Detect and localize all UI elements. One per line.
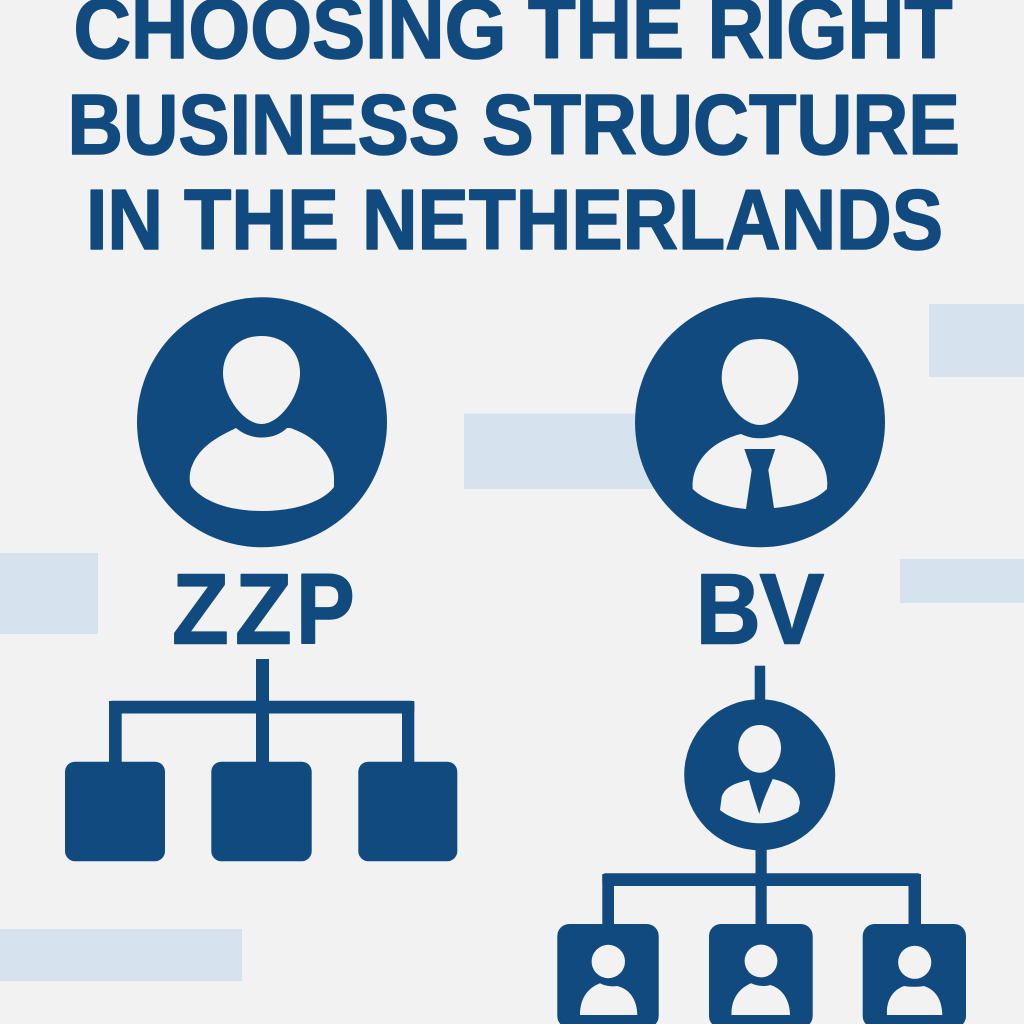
staff card 1 bbox=[557, 924, 659, 1024]
label: BV: V bbox=[760, 553, 824, 665]
label: ZZP bbox=[172, 553, 355, 665]
title: THE bbox=[184, 173, 339, 268]
staff card 2 bbox=[709, 924, 813, 1024]
label: BV: B bbox=[696, 554, 761, 665]
chart: ZZP structure bbox=[65, 659, 457, 861]
chart: BV structure bbox=[557, 666, 966, 1024]
title: BUSINESS bbox=[68, 78, 460, 173]
label: ZZP: P bbox=[296, 553, 355, 665]
decorative background bars bbox=[0, 304, 1024, 981]
icon: BV businessperson bbox=[635, 297, 885, 547]
title bbox=[68, 0, 960, 268]
staff card 3 bbox=[863, 924, 966, 1024]
title: STRUCTURE bbox=[482, 78, 960, 173]
title: NETHERLANDS bbox=[362, 173, 943, 268]
label: ZZP: ZZ bbox=[172, 554, 292, 665]
title: IN bbox=[86, 173, 163, 268]
icon: ZZP person bbox=[137, 297, 387, 547]
label: BV bbox=[696, 553, 824, 665]
